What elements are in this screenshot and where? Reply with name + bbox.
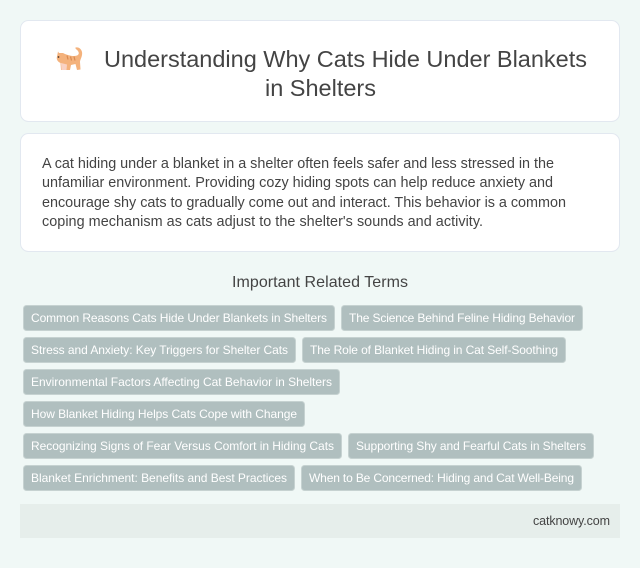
footer	[20, 504, 620, 538]
panel: title card	[20, 20, 620, 122]
tag	[24, 434, 342, 458]
tag	[24, 402, 304, 426]
tag: Supporting Shy and Fearful Cats in Shelters	[356, 439, 586, 453]
description text: A cat hiding under a blanket in a shelter often feels safer and less stressed in the	[42, 156, 554, 172]
title text: in Shelters	[265, 75, 376, 101]
tag	[24, 466, 294, 490]
tag	[24, 338, 296, 362]
tag: Common Reasons Cats Hide Under Blankets in Shelters	[31, 311, 327, 325]
tag	[24, 370, 340, 394]
title text	[104, 46, 587, 101]
description text	[42, 156, 566, 230]
tag list	[24, 306, 594, 490]
tag: How Blanket Hiding Helps Cats Cope with Change	[31, 407, 297, 421]
tag	[342, 306, 582, 330]
tag	[24, 306, 334, 330]
tag	[302, 466, 582, 490]
tag: Recognizing Signs of Fear Versus Comfort in Hiding Cats	[31, 439, 334, 453]
icon: cat	[57, 47, 82, 70]
heading: important related terms: Important Related Terms	[232, 274, 408, 291]
tag: The Role of Blanket Hiding in Cat Self-Soothing	[310, 343, 558, 357]
description text: coping mechanism as cats adjust to the shelter's sounds and activity.	[42, 214, 483, 230]
tag: Stress and Anxiety: Key Triggers for Shelter Cats	[31, 343, 288, 357]
tag	[348, 434, 594, 458]
tag	[302, 338, 566, 362]
tag: Blanket Enrichment: Benefits and Best Practices	[31, 471, 287, 485]
description text: unfamiliar environment. Providing cozy hiding spots can help reduce anxiety and	[42, 175, 553, 191]
title text: Understanding Why Cats Hide Under Blankets	[104, 46, 587, 72]
footer: catknowy.com	[533, 514, 610, 528]
tag: Environmental Factors Affecting Cat Behavior in Shelters	[31, 375, 332, 389]
tag: The Science Behind Feline Hiding Behavior	[349, 311, 575, 325]
panel: description card	[20, 134, 620, 252]
description text: encourage shy cats to gradually come out and interact. This behavior is a common	[42, 195, 566, 211]
tag: When to Be Concerned: Hiding and Cat Well-Being	[309, 471, 574, 485]
